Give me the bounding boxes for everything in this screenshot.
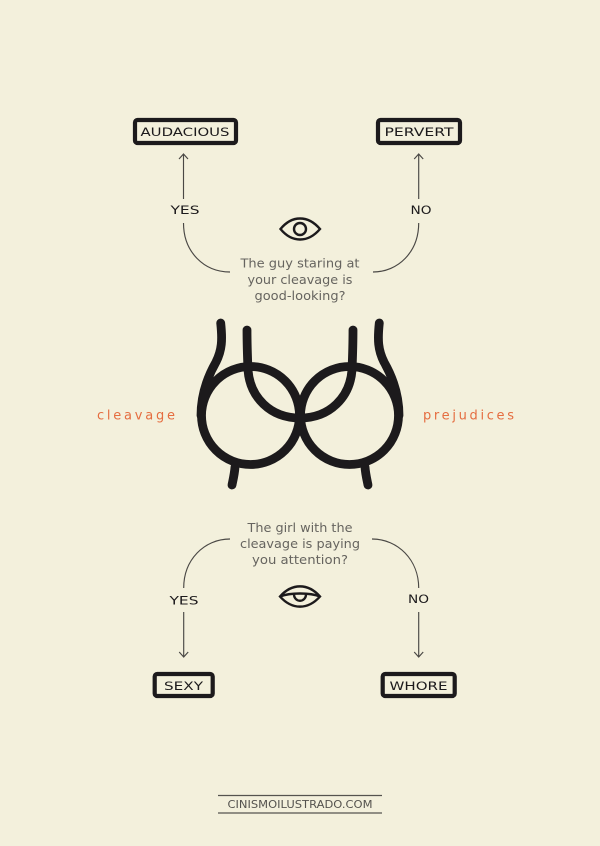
arrow: no up to pervert xyxy=(414,154,423,199)
arrow: no down to whore xyxy=(414,612,423,657)
box: AUDACIOUS xyxy=(135,120,236,143)
label: NO: NO xyxy=(410,203,432,217)
arrow: yes down to sexy xyxy=(179,612,188,657)
footer credit xyxy=(218,796,382,813)
box: AUDACIOUS: AUDACIOUS xyxy=(140,125,230,139)
box: SEXY xyxy=(155,674,213,696)
connector: question to yes xyxy=(184,539,230,588)
question: girl with cleavage: cleavage is paying xyxy=(240,537,360,551)
box: SEXY: SEXY xyxy=(164,679,204,693)
box: PERVERT: PERVERT xyxy=(384,125,455,139)
question: girl with cleavage: you attention? xyxy=(252,553,348,567)
bottom flowchart xyxy=(155,521,455,696)
cleavage illustration xyxy=(201,323,399,485)
connector: question to no xyxy=(373,223,419,272)
arrow: yes up to audacious xyxy=(179,154,188,199)
label: prejudices: prejudices xyxy=(423,408,514,424)
connector: question to no xyxy=(372,539,419,588)
box: PERVERT xyxy=(378,120,460,143)
icon: half-closed eye xyxy=(280,586,320,607)
label: YES: YES xyxy=(168,594,198,608)
box: WHORE: WHORE xyxy=(390,679,448,693)
top flowchart xyxy=(135,120,460,303)
question: girl with cleavage xyxy=(240,521,360,567)
footer credit: CINISMOILUSTRADO.COM xyxy=(228,799,372,811)
icon: open eye xyxy=(280,218,320,240)
connector: question to yes xyxy=(184,223,230,272)
question: guy staring: good-looking? xyxy=(254,289,346,303)
question: guy staring: The guy staring at xyxy=(239,256,360,270)
label: YES: YES xyxy=(169,203,200,217)
question: guy staring xyxy=(239,256,360,303)
question: girl with cleavage: The girl with the xyxy=(246,521,352,535)
box: WHORE xyxy=(383,674,455,696)
question: guy staring: your cleavage is xyxy=(248,273,352,287)
label: cleavage: cleavage xyxy=(97,408,175,424)
label: NO: NO xyxy=(408,592,429,606)
